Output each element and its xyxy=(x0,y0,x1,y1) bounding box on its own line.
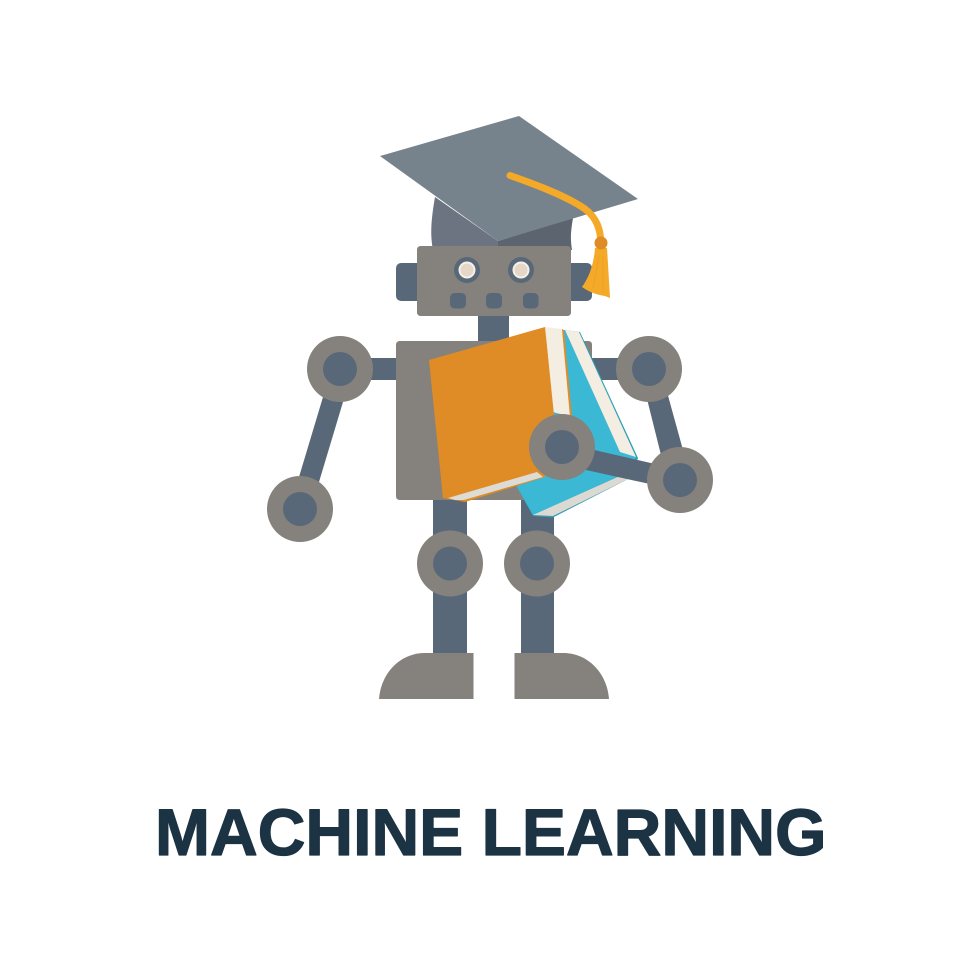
graduation cap board xyxy=(380,116,638,241)
robot head xyxy=(417,246,571,316)
blue book xyxy=(517,330,638,518)
graduation cap tassel xyxy=(510,176,610,298)
robot ears xyxy=(396,263,592,301)
robot legs xyxy=(379,495,609,699)
robot right upper arm xyxy=(588,336,683,455)
orange book xyxy=(429,327,572,502)
graduation cap crown xyxy=(431,197,573,250)
title: MACHINE LEARNING xyxy=(155,796,826,869)
eyes xyxy=(454,257,534,283)
robot torso xyxy=(396,341,592,500)
mouth xyxy=(450,293,538,308)
robot illustration xyxy=(267,116,713,699)
robot forearm and hand xyxy=(529,414,713,513)
robot left arm xyxy=(267,336,400,542)
robot neck xyxy=(478,314,509,344)
